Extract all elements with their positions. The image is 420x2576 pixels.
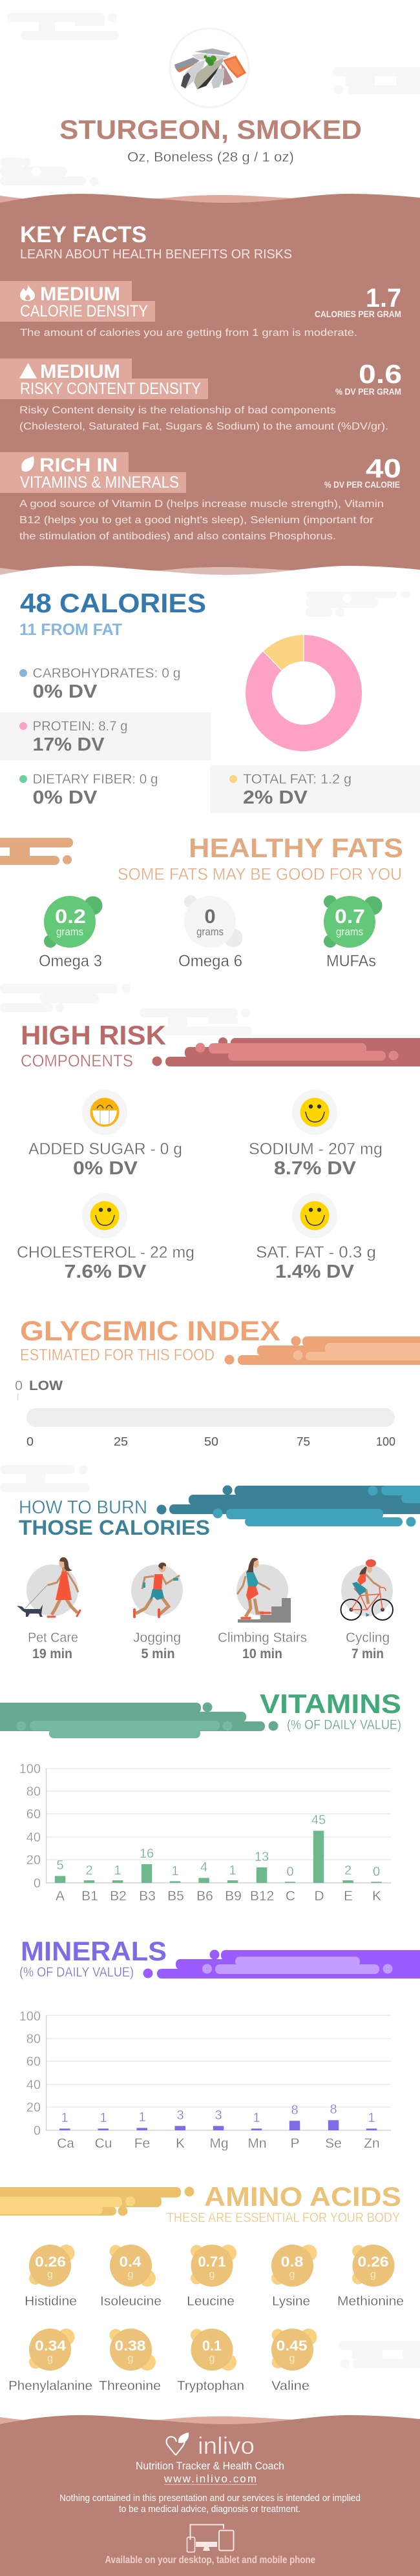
subheading: percent of daily value: (% OF DAILY VALUE) bbox=[287, 1718, 401, 1732]
fact: rich in vitamins and minerals: 40 bbox=[366, 453, 401, 483]
website link: www.inlivo.com bbox=[163, 2473, 257, 2485]
bar chart: minerals: 60 bbox=[26, 2055, 41, 2069]
subheading: from fat: 11 FROM FAT bbox=[19, 621, 122, 639]
bar chart: vitamins: 80 bbox=[26, 1785, 41, 1799]
bar chart: minerals: P bbox=[290, 2136, 300, 2151]
legend: dietary fiber: DIETARY FIBER: 0 g bbox=[32, 772, 158, 787]
amino: valine: g bbox=[289, 2353, 295, 2364]
banner: purple cloud bbox=[143, 1949, 420, 1979]
amino: lysine bbox=[271, 2245, 317, 2309]
activity: climbing stairs bbox=[236, 1558, 291, 1623]
amino: histidine: Histidine bbox=[25, 2294, 77, 2309]
bar chart: vitamins: D bbox=[314, 1889, 324, 1904]
badge: omega 3: grams bbox=[56, 926, 83, 938]
amino: tryptophan bbox=[177, 2329, 244, 2393]
amino: tryptophan: Tryptophan bbox=[177, 2379, 244, 2393]
item: cholesterol bbox=[17, 1193, 194, 1282]
subheading: ESTIMATED FOR THIS FOOD bbox=[20, 1346, 215, 1364]
bar chart: vitamins: C bbox=[286, 1889, 295, 1904]
amino: histidine bbox=[25, 2245, 77, 2309]
fact: risky content density: % DV PER GRAM bbox=[335, 386, 401, 397]
bar chart: vitamins: 0 bbox=[34, 1876, 41, 1891]
banner: yellow cloud bbox=[0, 2187, 194, 2216]
activity labels: 5 min bbox=[141, 1646, 174, 1661]
badge: omega 3 bbox=[39, 896, 102, 970]
bar chart: vitamins: K bbox=[372, 1889, 381, 1904]
bar chart: minerals: Zn bbox=[364, 2136, 380, 2151]
bar chart: vitamins: 13 bbox=[255, 1850, 269, 1864]
bar chart: vitamins: B6 bbox=[196, 1889, 213, 1904]
activity labels: Climbing Stairs bbox=[218, 1630, 307, 1645]
fact: risky content density: (Cholesterol, Saturated Fat, Sugars & Sodium) to the amount (%DV/gr). bbox=[19, 421, 388, 432]
gauge scale: 100 bbox=[376, 1435, 395, 1448]
section: glycemic index bbox=[15, 1316, 420, 1448]
bar chart: minerals: 0 bbox=[34, 2124, 41, 2138]
heading: healthy fats: HEALTHY FATS bbox=[189, 833, 403, 863]
section: high risk components bbox=[17, 1020, 420, 1282]
badge: omega 6: grams bbox=[196, 926, 224, 938]
amino: leucine: g bbox=[209, 2269, 215, 2280]
fact: calorie density: CALORIE DENSITY bbox=[20, 302, 148, 320]
activity: jogging bbox=[131, 1563, 183, 1617]
subheading: percent of daily value: (% OF DAILY VALUE) bbox=[19, 1965, 134, 1980]
legend: dietary fiber bbox=[19, 772, 158, 808]
legend: total fat bbox=[210, 765, 420, 813]
fact: rich in vitamins and minerals: the stimulation of antibodies) and also contains Phosphorus. bbox=[19, 531, 336, 542]
activity: pet care bbox=[17, 1557, 80, 1617]
section: amino acids bbox=[0, 2181, 404, 2393]
legend: protein: 17% DV bbox=[32, 734, 105, 755]
item: cholesterol: 7.6% DV bbox=[65, 1262, 147, 1282]
activity labels: Cycling bbox=[346, 1630, 390, 1645]
logo wordmark: inlivo bbox=[198, 2433, 255, 2459]
fact: calorie density: CALORIES PER GRAM bbox=[315, 309, 401, 319]
bar chart: minerals: Cu bbox=[95, 2136, 112, 2151]
bar chart: vitamins: 1 bbox=[229, 1864, 236, 1878]
amino: methionine: Methionine bbox=[337, 2294, 404, 2309]
gauge scale: 25 bbox=[114, 1435, 128, 1448]
activity labels: 19 min bbox=[32, 1646, 72, 1661]
amino: leucine: Leucine bbox=[187, 2294, 235, 2309]
amino: threonine: Threonine bbox=[99, 2379, 161, 2393]
amino: histidine: 0.26 bbox=[35, 2254, 66, 2270]
badge: mufas bbox=[324, 895, 383, 970]
bar chart: vitamins: 45 bbox=[311, 1813, 326, 1827]
heading: those calories: THOSE CALORIES bbox=[19, 1516, 210, 1539]
subheading: components: COMPONENTS bbox=[21, 1051, 133, 1070]
amino: isoleucine: Isoleucine bbox=[100, 2294, 162, 2309]
subheading: LEARN ABOUT HEALTH BENEFITS OR RISKS bbox=[20, 247, 292, 262]
bar chart: vitamins: B2 bbox=[110, 1889, 127, 1904]
fact: calorie density: MEDIUM bbox=[40, 284, 120, 305]
bar chart: minerals: 3 bbox=[176, 2108, 184, 2123]
bar chart: minerals: Se bbox=[325, 2136, 342, 2151]
badge: omega 3: Omega 3 bbox=[39, 952, 102, 970]
heading: glycemic index: GLYCEMIC INDEX bbox=[20, 1316, 280, 1347]
bar chart: vitamins: 16 bbox=[140, 1847, 154, 1861]
gauge scale: 50 bbox=[204, 1435, 218, 1448]
item: saturated fat: 1.4% DV bbox=[275, 1262, 355, 1282]
amino: leucine bbox=[187, 2245, 236, 2309]
activity labels: Pet Care bbox=[28, 1630, 78, 1645]
bar chart: vitamins: B3 bbox=[139, 1889, 156, 1904]
gauge bar bbox=[26, 1408, 395, 1427]
amino: methionine: 0.26 bbox=[358, 2254, 389, 2270]
bar chart: minerals: 20 bbox=[26, 2101, 41, 2115]
bar chart: vitamins: 4 bbox=[200, 1860, 207, 1875]
panel: key facts bbox=[0, 194, 420, 592]
icon: devices bbox=[187, 2524, 234, 2552]
heading: high risk: HIGH RISK bbox=[21, 1020, 166, 1050]
fact: rich in vitamins and minerals: RICH IN bbox=[39, 455, 118, 476]
heading: vitamins: VITAMINS bbox=[260, 1688, 401, 1719]
heading: amino acids: AMINO ACIDS bbox=[204, 2181, 401, 2212]
bar chart: minerals: 80 bbox=[26, 2032, 41, 2046]
heading: how to burn: HOW TO BURN bbox=[19, 1497, 147, 1518]
activity: cycling bbox=[341, 1559, 393, 1620]
fact: rich in vitamins and minerals: VITAMINS & MINERALS bbox=[20, 473, 179, 492]
gauge scale: 0 bbox=[26, 1435, 34, 1448]
badge: mufas: 0.7 bbox=[335, 905, 365, 928]
bar chart: minerals: K bbox=[176, 2136, 185, 2151]
icon: fish assortment bbox=[174, 48, 246, 89]
header: food image in ring bbox=[170, 28, 249, 107]
heading: key facts: KEY FACTS bbox=[20, 222, 147, 247]
serving size subtitle: Oz, Boneless (28 g / 1 oz) bbox=[127, 150, 294, 165]
bar chart: minerals: 3 bbox=[215, 2108, 222, 2123]
fact: risky content density: MEDIUM bbox=[40, 361, 120, 382]
legend: total fat: 2% DV bbox=[243, 787, 308, 808]
badge: omega 6 bbox=[178, 895, 246, 970]
amino: lysine: g bbox=[289, 2269, 295, 2280]
amino: leucine: 0.71 bbox=[198, 2254, 226, 2270]
disclaimer bbox=[59, 2493, 361, 2515]
item: saturated fat bbox=[256, 1193, 376, 1282]
amino: isoleucine: g bbox=[128, 2269, 133, 2280]
banner: orange cloud bbox=[0, 838, 73, 865]
bar chart: vitamins: B12 bbox=[250, 1889, 274, 1904]
bar chart: minerals: 1 bbox=[61, 2111, 68, 2125]
bar chart: minerals: 8 bbox=[330, 2103, 337, 2117]
amino: valine bbox=[271, 2329, 317, 2393]
fact: rich in vitamins and minerals: A good source of Vitamin D (helps increase muscle strength), Vitamin bbox=[19, 499, 384, 510]
gauge scale bbox=[26, 1435, 395, 1448]
bar chart: vitamins: 40 bbox=[26, 1831, 41, 1845]
activity labels: Jogging bbox=[133, 1630, 181, 1645]
badge: omega 6: Omega 6 bbox=[178, 952, 242, 970]
section: minerals bbox=[19, 1936, 420, 2151]
amino: threonine: 0.38 bbox=[115, 2338, 146, 2354]
amino: threonine: g bbox=[128, 2353, 133, 2364]
title: STURGEON, SMOKED bbox=[59, 114, 362, 145]
legend: carbohydrates: CARBOHYDRATES: 0 g bbox=[32, 666, 181, 681]
bar chart: vitamins: 1 bbox=[171, 1864, 179, 1878]
amino: phenylalanine: Phenylalanine bbox=[8, 2379, 92, 2393]
bar chart: vitamins: 0 bbox=[286, 1865, 294, 1879]
bar chart: vitamins: B1 bbox=[81, 1889, 98, 1904]
bar chart: vitamins bbox=[19, 1762, 391, 1904]
heading: 48 calories: 48 CALORIES bbox=[20, 588, 206, 618]
availability note: Available on your desktop, tablet and mobile phone bbox=[105, 2555, 315, 2566]
amino: lysine: Lysine bbox=[272, 2294, 310, 2309]
amino: isoleucine: 0.4 bbox=[119, 2254, 142, 2270]
item: saturated fat: SAT. FAT - 0.3 g bbox=[256, 1243, 376, 1262]
fact: rich in vitamins and minerals: B12 (helps you to get a good night's sleep), Selenium (important for bbox=[19, 515, 374, 526]
legend: protein: PROTEIN: 8.7 g bbox=[32, 719, 128, 734]
disclaimer: to be a medical advice, diagnosis or treatment. bbox=[119, 2504, 300, 2515]
legend: total fat: TOTAL FAT: 1.2 g bbox=[243, 772, 352, 787]
bar chart: minerals: 40 bbox=[26, 2078, 41, 2092]
badge: mufas: grams bbox=[336, 926, 363, 938]
badge: omega 3: 0.2 bbox=[55, 905, 86, 928]
bar chart: vitamins: 1 bbox=[114, 1864, 121, 1878]
bar chart: minerals: 1 bbox=[253, 2111, 260, 2125]
fact: rich in vitamins and minerals bbox=[0, 452, 401, 542]
fact: risky content density: Risky Content density is the relationship of bad components bbox=[19, 405, 336, 416]
bar chart: minerals: Mn bbox=[247, 2136, 267, 2151]
bar chart: minerals: 1 bbox=[138, 2110, 146, 2124]
amino: phenylalanine: g bbox=[47, 2353, 53, 2364]
gauge value bbox=[15, 1378, 63, 1400]
fact: risky content density: RISKY CONTENT DENSITY bbox=[20, 380, 201, 398]
amino: tryptophan: g bbox=[209, 2353, 215, 2364]
amino: histidine: g bbox=[47, 2269, 53, 2280]
amino: methionine: g bbox=[370, 2269, 376, 2280]
bar chart: minerals bbox=[19, 2010, 391, 2151]
item: added sugar: 0% DV bbox=[73, 1158, 138, 1179]
amino: tryptophan: 0.1 bbox=[202, 2338, 222, 2354]
gauge value: LOW bbox=[29, 1378, 63, 1393]
item: sodium: SODIUM - 207 mg bbox=[249, 1140, 383, 1158]
banner: orange cloud bbox=[225, 1336, 420, 1365]
subheading: SOME FATS MAY BE GOOD FOR YOU bbox=[118, 864, 402, 884]
item: sodium: 8.7% DV bbox=[274, 1158, 357, 1179]
bar chart: vitamins: 0 bbox=[373, 1865, 380, 1879]
amino: phenylalanine bbox=[8, 2329, 92, 2393]
icon: warning triangle bbox=[19, 363, 37, 379]
bar chart: vitamins: 2 bbox=[85, 1864, 93, 1878]
footer panel bbox=[0, 2415, 420, 2576]
donut chart bbox=[246, 635, 362, 751]
bar chart: vitamins: 100 bbox=[19, 1762, 41, 1776]
fact: risky content density: 0.6 bbox=[359, 359, 402, 389]
bar chart: vitamins: 2 bbox=[344, 1864, 352, 1878]
gauge value: 0 bbox=[15, 1378, 23, 1393]
section: vitamins bbox=[0, 1688, 401, 1904]
activity labels: 10 min bbox=[242, 1646, 282, 1661]
bar chart: minerals: Fe bbox=[134, 2136, 150, 2151]
bar chart: minerals: 1 bbox=[100, 2111, 107, 2125]
badge: omega 6: 0 bbox=[204, 905, 216, 928]
banner: green cloud bbox=[0, 1703, 278, 1738]
amino: methionine bbox=[337, 2245, 404, 2309]
fact: calorie density: The amount of calories you are getting from 1 gram is moderate. bbox=[20, 327, 357, 338]
disclaimer: Nothing contained in this presentation and our services is intended or implied bbox=[59, 2493, 361, 2504]
legend: dietary fiber: 0% DV bbox=[32, 787, 98, 808]
section: healthy fats bbox=[0, 833, 403, 970]
banner: teal cloud bbox=[156, 1486, 420, 1527]
icon: leaf bbox=[21, 456, 34, 472]
bar chart: vitamins: A bbox=[56, 1889, 65, 1904]
legend: carbohydrates: 0% DV bbox=[32, 681, 98, 702]
amino: valine: 0.45 bbox=[277, 2338, 308, 2354]
amino: lysine: 0.8 bbox=[280, 2254, 304, 2270]
bar chart: vitamins: 20 bbox=[26, 1853, 41, 1867]
fact: rich in vitamins and minerals: % DV PER CALORIE bbox=[324, 479, 400, 490]
fact: calorie density bbox=[0, 281, 401, 338]
logo: heart and leaf bbox=[167, 2433, 188, 2455]
bar chart: vitamins: 5 bbox=[56, 1858, 64, 1873]
bar chart: vitamins: E bbox=[344, 1889, 353, 1904]
item: added sugar: ADDED SUGAR - 0 g bbox=[28, 1140, 182, 1158]
bar chart: minerals: Mg bbox=[209, 2136, 229, 2151]
activity labels: 7 min bbox=[352, 1646, 384, 1661]
fact: calorie density: 1.7 bbox=[366, 283, 401, 313]
amino: threonine bbox=[99, 2329, 161, 2393]
icon: flame bbox=[20, 284, 35, 301]
amino: isoleucine bbox=[100, 2245, 162, 2309]
tagline: Nutrition Tracker & Health Coach bbox=[136, 2460, 284, 2472]
badge: mufas: MUFAs bbox=[326, 952, 376, 970]
amino: phenylalanine: 0.34 bbox=[35, 2338, 67, 2354]
bar chart: vitamins: B9 bbox=[225, 1889, 242, 1904]
section: how to burn those calories bbox=[17, 1486, 420, 1661]
bar chart: minerals: 1 bbox=[368, 2111, 375, 2125]
item: cholesterol: CHOLESTEROL - 22 mg bbox=[17, 1243, 194, 1262]
bar chart: minerals: 100 bbox=[19, 2010, 41, 2024]
bar chart: minerals: Ca bbox=[57, 2136, 74, 2151]
heading: minerals: MINERALS bbox=[21, 1936, 167, 1966]
banner: red cloud bbox=[152, 1037, 420, 1066]
activity labels bbox=[28, 1630, 390, 1661]
item: added sugar bbox=[28, 1090, 182, 1179]
bar chart: vitamins: 60 bbox=[26, 1807, 41, 1822]
item: sodium bbox=[249, 1090, 383, 1179]
fact: risky content density bbox=[0, 358, 402, 432]
amino: valine: Valine bbox=[271, 2379, 310, 2393]
legend: carbohydrates bbox=[19, 666, 181, 702]
bar chart: vitamins: B5 bbox=[167, 1889, 184, 1904]
section: calories bbox=[0, 588, 420, 813]
bar chart: minerals: 8 bbox=[291, 2103, 299, 2117]
gauge scale: 75 bbox=[297, 1435, 310, 1448]
legend: protein bbox=[0, 712, 211, 760]
